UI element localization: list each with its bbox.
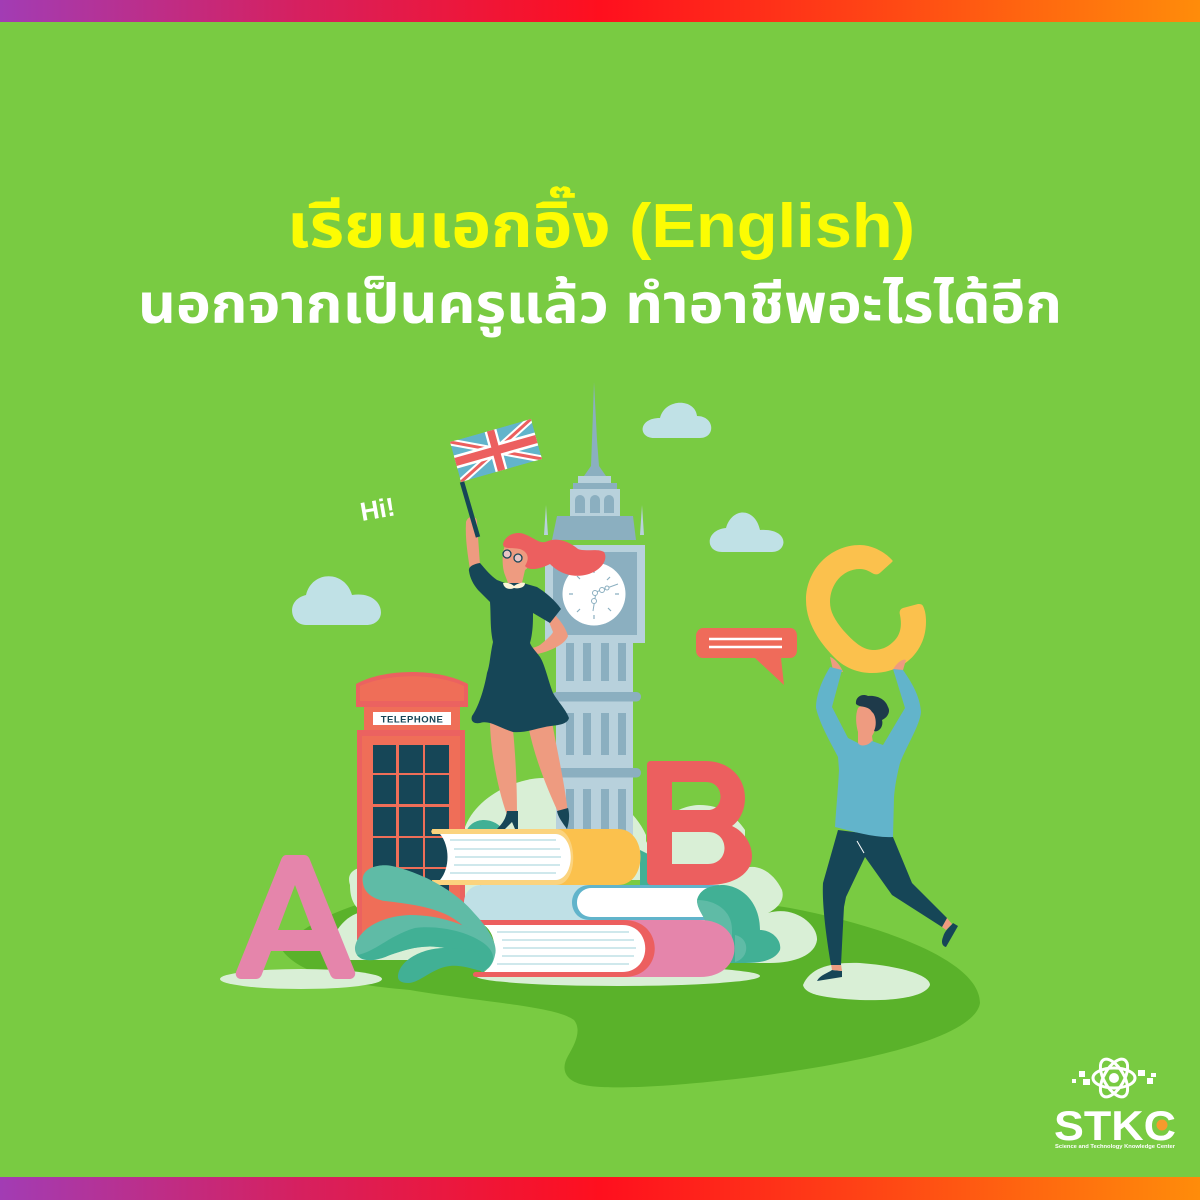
cloud left [292, 576, 381, 625]
roof [552, 516, 636, 540]
letter A [236, 855, 355, 979]
bottom gradient bar [0, 1177, 1200, 1200]
bottom pink book [473, 920, 734, 977]
light foliage [697, 900, 746, 962]
sign [373, 712, 451, 725]
spire [584, 382, 606, 476]
neck and face [503, 545, 530, 583]
inner cover [431, 829, 573, 885]
hair [856, 695, 889, 731]
middle book [464, 885, 719, 920]
left plant [355, 865, 496, 983]
raised arm [466, 517, 480, 570]
neck and face [856, 706, 877, 747]
Hi text: Hi! [358, 491, 397, 527]
booth roof [356, 672, 468, 707]
logo pixel squares [1072, 1070, 1156, 1085]
red cover [473, 920, 655, 977]
cloud top [643, 403, 711, 438]
speech bubble [696, 628, 797, 685]
legs [490, 720, 568, 815]
cloud right [710, 512, 783, 552]
tower body [556, 640, 633, 835]
bush behind tower [464, 778, 646, 880]
hip arm [525, 613, 568, 654]
top yellow book [431, 829, 640, 885]
shoes [817, 923, 958, 981]
title line 1: เรียนเอกอิ๊ง (English) [287, 186, 915, 261]
STKC logo [1054, 1055, 1176, 1150]
shoes [497, 808, 569, 829]
logo orange dot [1156, 1120, 1168, 1130]
dark foliage [697, 885, 780, 963]
plant behind books [466, 820, 680, 885]
flag pole [462, 482, 478, 537]
bush left [330, 867, 480, 960]
text lines [450, 840, 561, 873]
leaf middle [355, 915, 494, 972]
dress [469, 563, 569, 732]
man holding C [816, 657, 958, 981]
belfry arches [575, 495, 614, 513]
blob under man [803, 963, 930, 1000]
leaf upper [363, 865, 496, 972]
ellipse under A [220, 969, 382, 989]
booth window [373, 745, 449, 895]
pages [440, 834, 571, 880]
sign text: TELEPHONE [381, 714, 443, 726]
ankles [831, 918, 952, 971]
letter B [647, 761, 752, 885]
belfry tiers [578, 476, 611, 483]
Big Ben tower [544, 382, 645, 835]
bubble body [696, 628, 797, 685]
woman with flag [450, 419, 605, 829]
tower windows [566, 643, 626, 831]
title line 2: นอกจากเป็นครูแล้ว ทำอาชีพอะไรได้อีก [138, 273, 1062, 338]
pages [577, 888, 707, 917]
tower bands [552, 692, 641, 702]
ellipse under books [476, 966, 760, 986]
bubble lines [709, 639, 782, 647]
pages [484, 925, 645, 972]
ground hill [282, 887, 980, 1087]
cover [432, 829, 640, 885]
collar [503, 583, 525, 589]
top gradient bar [0, 0, 1200, 22]
booth body [357, 730, 465, 940]
telephone booth [356, 672, 468, 940]
text lines [497, 932, 636, 964]
pants [823, 830, 947, 965]
title [138, 186, 1062, 338]
pocket line [857, 841, 864, 853]
booth neck [364, 707, 460, 731]
bush right [640, 805, 817, 963]
cover [610, 920, 734, 977]
right plant [697, 885, 780, 963]
shirt [816, 667, 921, 837]
cover [464, 885, 719, 920]
clock housing [545, 545, 645, 643]
spine [572, 885, 719, 920]
clock face [562, 562, 626, 626]
leaf lower [398, 948, 484, 983]
book stack [431, 829, 780, 977]
logo atom mark [1093, 1055, 1135, 1101]
glasses [503, 550, 522, 562]
hands [830, 657, 906, 672]
letter C [806, 545, 926, 673]
logo tagline: Science and Technology Knowledge Center [1055, 1144, 1175, 1150]
bushes background [220, 778, 930, 1000]
logo wordmark: STKC [1054, 1102, 1176, 1149]
flag [450, 419, 542, 482]
hair [503, 533, 605, 576]
